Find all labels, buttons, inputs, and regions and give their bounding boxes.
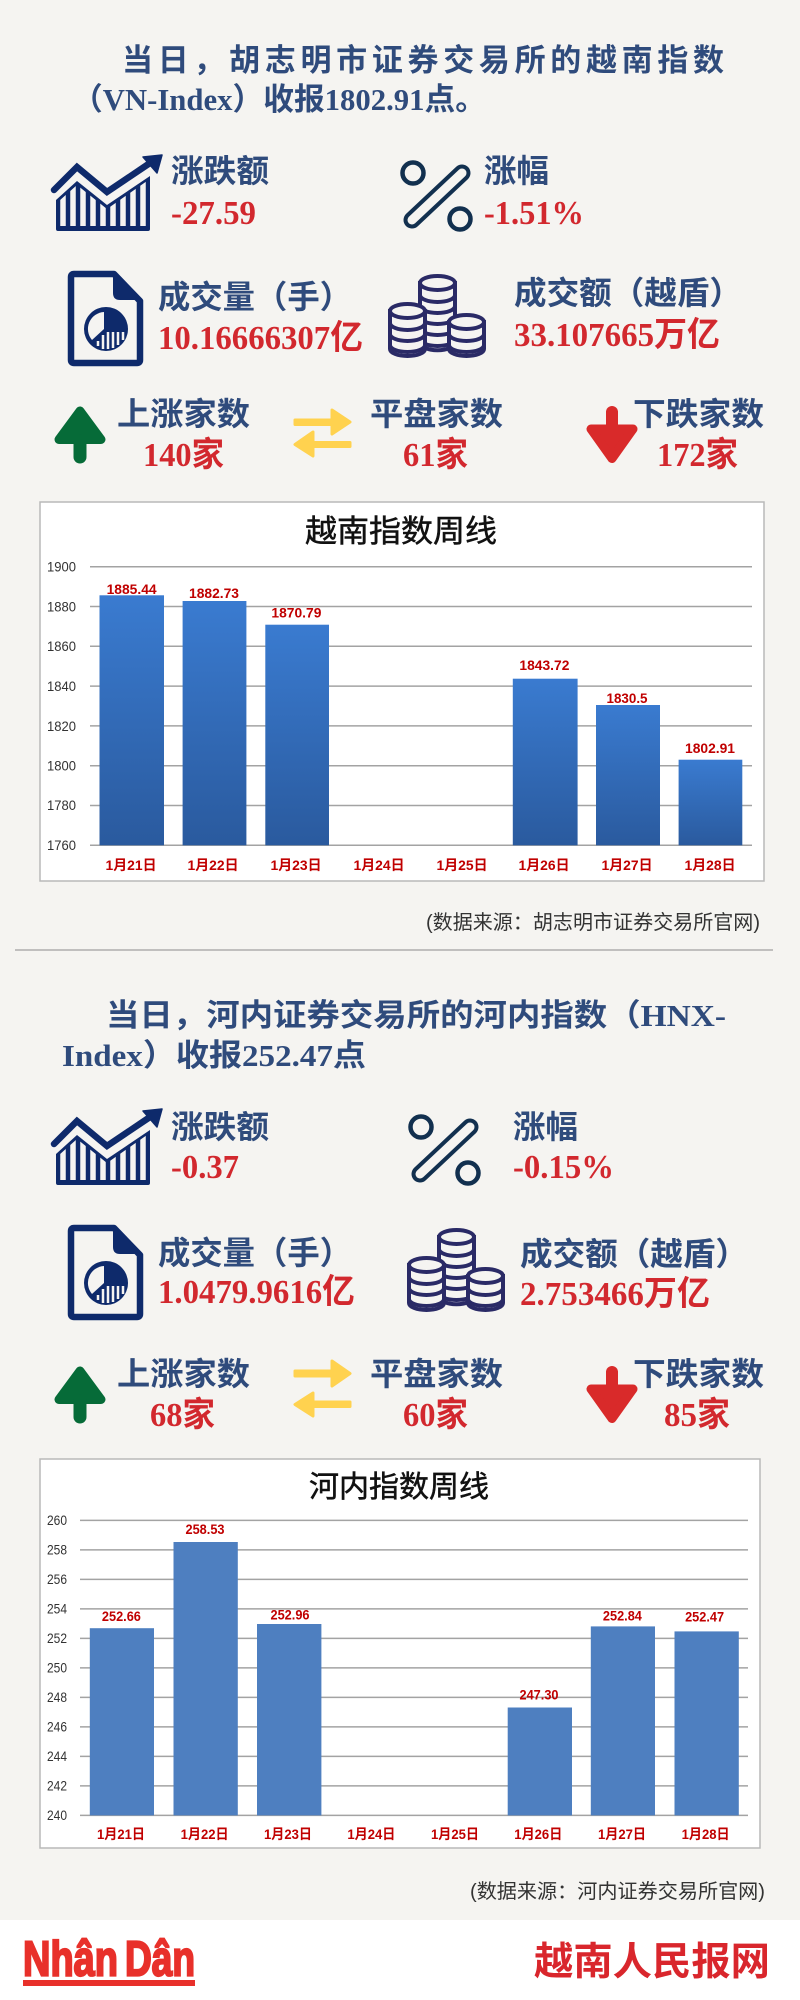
- x axis labels: 1月22日: [188, 857, 238, 873]
- panel: HNX-Index: [40, 998, 765, 1903]
- value labels: 1843.72: [519, 657, 570, 673]
- y axis labels: 1860: [47, 638, 76, 654]
- stat: turnover: [514, 275, 742, 354]
- y axis labels: 1780: [47, 797, 76, 813]
- stat: advancers: 上涨家数: [117, 1356, 250, 1392]
- value labels: 1870.79: [271, 605, 322, 621]
- y axis labels: 248: [47, 1689, 67, 1705]
- x axis labels: 1月24日: [347, 1826, 395, 1842]
- stat: decliners: [633, 1356, 764, 1434]
- source note: (数据来源：胡志明市证券交易所官网): [426, 911, 760, 934]
- logo: Nhan Dan: Dân: [125, 1932, 195, 1986]
- y axis labels: 246: [47, 1718, 67, 1734]
- stat: percent change: 涨幅: [484, 153, 549, 189]
- value labels: 1830.5: [606, 690, 648, 706]
- stat: turnover: 2.753466万亿: [520, 1275, 710, 1313]
- value labels: 252.66: [102, 1608, 141, 1624]
- stat: price change: [171, 153, 269, 232]
- stat: unchanged: 60家: [403, 1396, 468, 1434]
- stat: volume: 1.0479.9616亿: [158, 1273, 355, 1311]
- bars: [100, 595, 742, 845]
- stat: decliners: 85家: [664, 1396, 730, 1434]
- value labels: [107, 581, 735, 756]
- stat: price change: -27.59: [171, 195, 256, 232]
- stat: advancers: 上涨家数: [117, 396, 250, 432]
- stat: advancers: 140家: [143, 436, 224, 474]
- value labels: [102, 1521, 724, 1703]
- stat: volume: [158, 279, 363, 357]
- x axis labels: 1月26日: [514, 1826, 562, 1842]
- y axis labels: [47, 1512, 67, 1823]
- stat: advancers: [117, 396, 250, 474]
- footer: [0, 1920, 800, 2000]
- y axis labels: 1840: [47, 678, 76, 694]
- stat: price change: [171, 1109, 269, 1186]
- y axis labels: 1880: [47, 598, 76, 614]
- stat: decliners: 172家: [657, 436, 738, 474]
- stat: advancers: 68家: [150, 1396, 215, 1434]
- x axis labels: 1月27日: [598, 1826, 646, 1842]
- value labels: 1885.44: [107, 581, 157, 597]
- y axis labels: 252: [47, 1630, 67, 1646]
- stat: percent change: 涨幅: [513, 1109, 578, 1145]
- stat: unchanged: [370, 396, 503, 474]
- heading: HNX-Index summary: [62, 998, 726, 1073]
- icon: coin stacks: [390, 276, 484, 356]
- value labels: 1882.73: [189, 585, 239, 601]
- stat: price change: -0.37: [171, 1149, 239, 1186]
- stat: unchanged: 平盘家数: [370, 1356, 503, 1392]
- x axis labels: 1月23日: [264, 1826, 312, 1842]
- icon: document with pie chart: [71, 1226, 143, 1317]
- value labels: 1802.91: [685, 740, 735, 756]
- stat: price change: 涨跌额: [171, 1109, 269, 1145]
- chart title: 河内指数周线: [309, 1471, 489, 1504]
- y axis labels: 1760: [47, 837, 76, 853]
- stat: turnover: 成交额（越盾）: [520, 1236, 748, 1272]
- x axis labels: 1月21日: [97, 1826, 145, 1842]
- icon: percent: [402, 162, 470, 230]
- x axis labels: 1月25日: [431, 1826, 479, 1842]
- heading: HNX-Index summary: Index）收报252.47点: [62, 1038, 366, 1073]
- stat: turnover: 成交额（越盾）: [514, 275, 742, 311]
- stat: percent change: -0.15%: [513, 1149, 614, 1186]
- icon: down arrow: [591, 1372, 633, 1418]
- panel: VN-Index: [40, 43, 764, 934]
- chart title: 越南指数周线: [305, 514, 497, 549]
- stat: percent change: [484, 153, 584, 232]
- y axis labels: 1900: [47, 558, 76, 574]
- stat: volume: [158, 1235, 355, 1311]
- icon: coin stacks: [409, 1230, 503, 1310]
- icon: percent: [410, 1116, 478, 1184]
- value labels: 252.96: [270, 1607, 310, 1623]
- heading: VN-Index summary: 当日，胡志明市证券交易所的越南指数: [122, 43, 724, 78]
- stat: unchanged: [370, 1356, 503, 1434]
- x axis labels: 1月23日: [270, 857, 322, 873]
- stat: decliners: [633, 396, 764, 474]
- icon: up arrow: [59, 1371, 101, 1417]
- heading: VN-Index summary: [72, 43, 724, 117]
- stat: volume: 成交量（手）: [158, 279, 352, 315]
- icon: swap arrows: [295, 1361, 350, 1416]
- stat: volume: 10.16666307亿: [158, 319, 363, 357]
- stat: advancers: [117, 1356, 250, 1434]
- stat: unchanged: 平盘家数: [370, 396, 503, 432]
- x axis labels: 1月27日: [602, 857, 652, 873]
- y axis labels: 1800: [47, 758, 76, 774]
- x axis labels: [97, 1826, 730, 1842]
- icon: rising chart: [54, 155, 162, 231]
- heading: VN-Index summary: （VN-Index）收报1802.91点。: [72, 82, 486, 117]
- y axis labels: 1820: [47, 718, 76, 734]
- x axis labels: 1月28日: [684, 857, 736, 873]
- logo: Nhan Dan: Nhân: [23, 1932, 118, 1986]
- icon: document with pie chart: [71, 272, 143, 363]
- stat: turnover: 33.107665万亿: [514, 316, 720, 354]
- icon: up arrow: [59, 411, 101, 457]
- stat: unchanged: 61家: [403, 436, 468, 474]
- x axis labels: 1月21日: [106, 857, 156, 873]
- x axis labels: 1月24日: [354, 857, 404, 873]
- source note: (数据来源：河内证券交易所官网): [470, 1880, 765, 1903]
- x axis labels: [106, 857, 736, 873]
- value labels: 252.84: [603, 1607, 642, 1623]
- icon: rising chart: [54, 1109, 162, 1185]
- y axis labels: 260: [47, 1512, 67, 1528]
- y axis labels: 244: [47, 1748, 67, 1764]
- stat: volume: 成交量（手）: [158, 1235, 352, 1271]
- stat: decliners: 下跌家数: [633, 396, 764, 432]
- y axis labels: 258: [47, 1542, 67, 1558]
- icon: down arrow: [591, 412, 633, 458]
- value labels: 247.30: [520, 1687, 559, 1703]
- bars: [90, 1542, 739, 1815]
- stat: percent change: [513, 1109, 614, 1186]
- y axis labels: 250: [47, 1660, 67, 1676]
- y axis labels: 254: [47, 1600, 67, 1616]
- y axis labels: 240: [47, 1807, 67, 1823]
- y axis labels: [47, 558, 76, 853]
- stat: decliners: 下跌家数: [633, 1356, 764, 1392]
- y axis labels: 242: [47, 1778, 67, 1794]
- value labels: 258.53: [186, 1521, 225, 1537]
- stat: percent change: -1.51%: [484, 195, 584, 232]
- heading: HNX-Index summary: 当日，河内证券交易所的河内指数（HNX-: [106, 998, 726, 1033]
- bar chart: HNX-Index weekly: [40, 1459, 760, 1848]
- x axis labels: 1月22日: [181, 1826, 229, 1842]
- stat: price change: 涨跌额: [171, 153, 269, 189]
- stat: turnover: [520, 1236, 748, 1313]
- value labels: 252.47: [685, 1608, 724, 1624]
- x axis labels: 1月25日: [436, 857, 488, 873]
- x axis labels: 1月26日: [518, 857, 570, 873]
- site name: 越南人民报网: [534, 1941, 770, 1984]
- y axis labels: 256: [47, 1571, 67, 1587]
- x axis labels: 1月28日: [682, 1826, 730, 1842]
- bar chart: VN-Index weekly: [40, 502, 764, 881]
- icon: swap arrows: [295, 410, 350, 456]
